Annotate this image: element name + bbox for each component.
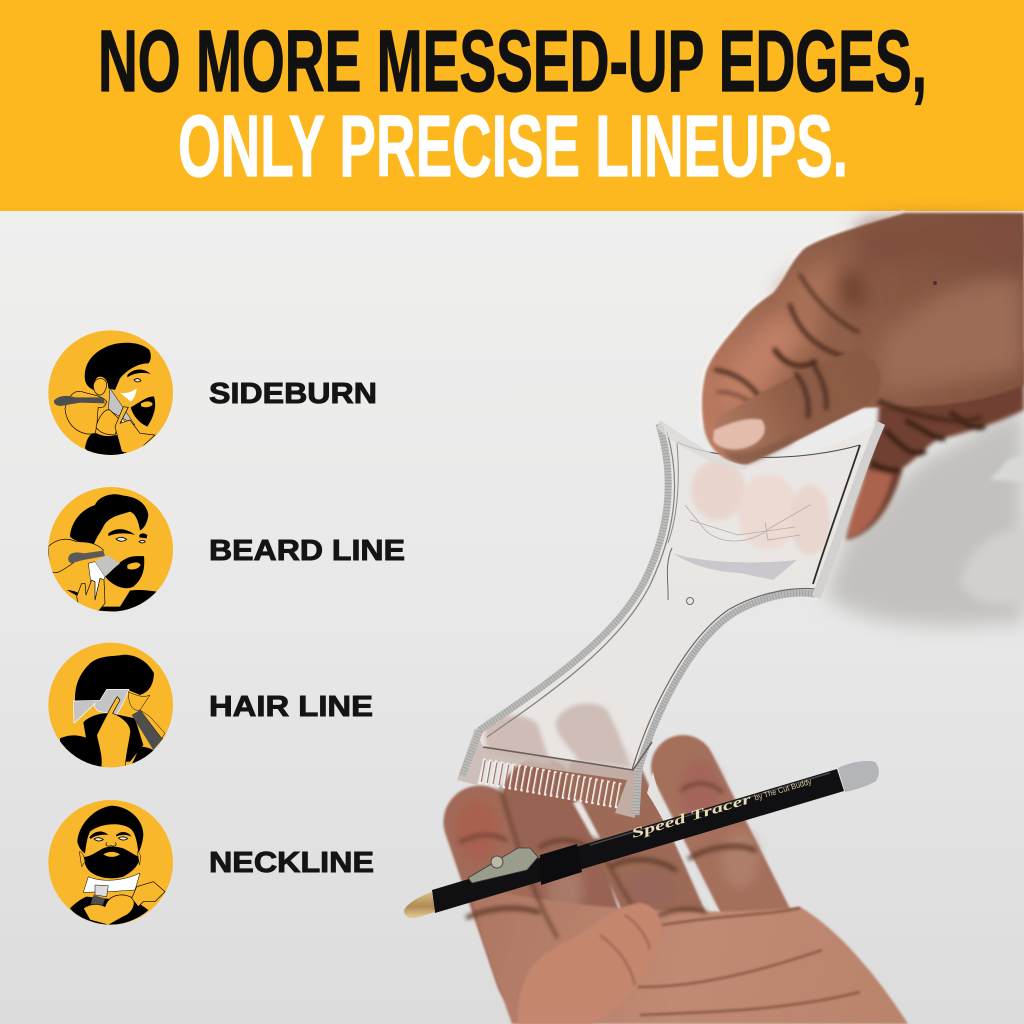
feature row: hair line (48, 643, 373, 772)
knuckle creases (716, 275, 980, 421)
comb teeth (481, 771, 621, 796)
photo background surface (0, 211, 1024, 1024)
icon: man trimming sideburn (48, 330, 173, 457)
photo: upper hand front (657, 213, 1024, 470)
fingers (480, 767, 760, 975)
finger creases (870, 412, 985, 471)
thumb (715, 348, 881, 464)
photo: lower open hand (456, 760, 908, 1024)
icon: man trimming beard line (48, 487, 173, 613)
light halo (702, 213, 905, 428)
sharpener screw (491, 856, 503, 868)
right edge and inner frame (816, 423, 881, 597)
pencil (404, 761, 879, 918)
barrel (432, 769, 844, 913)
thumbnail (713, 419, 765, 449)
cut-out shape (673, 553, 797, 580)
finger colour variation (456, 760, 758, 920)
label: HAIR LINE (209, 691, 373, 723)
thumb knuckle marks (795, 362, 826, 418)
finger and back highlights (715, 221, 1024, 415)
collar (540, 844, 582, 885)
feature row: sideburn (48, 330, 377, 457)
label: NECKLINE (209, 847, 374, 879)
cap (838, 761, 879, 792)
template body (475, 420, 880, 770)
gold tip (404, 892, 435, 918)
film over thumb (657, 420, 748, 470)
pencil brand text: Speed Tracer (630, 791, 754, 841)
base line (483, 742, 652, 770)
supporting thumb (518, 903, 660, 1024)
comb strip (457, 728, 637, 818)
icon: man trimming hair line (48, 643, 173, 772)
template ruler (457, 420, 881, 818)
header banner (0, 0, 1024, 211)
label: SIDEBURN (209, 378, 377, 410)
icon: man trimming neckline (48, 800, 173, 925)
thumb tip shade (722, 432, 800, 464)
pencil brand text (630, 773, 813, 841)
thumb and palm crease lines (600, 908, 860, 1015)
feature row: beard line (48, 487, 405, 613)
photo: upper hand fingers behind template (846, 350, 1024, 540)
feature row: neckline (48, 800, 374, 925)
pale fingers seen through template (485, 460, 830, 768)
palm (470, 885, 908, 1024)
light gaps between fingers (647, 772, 722, 914)
sharpener (468, 848, 538, 883)
pencil brand text: by The Cut Buddy (753, 777, 812, 802)
label: BEARD LINE (209, 535, 405, 567)
mole (933, 281, 937, 285)
faint template guide lines (685, 505, 810, 541)
barrel highlight (590, 773, 830, 845)
hand silhouette (702, 213, 1024, 464)
ruled lower edge (636, 593, 815, 815)
alignment line and hole (667, 548, 694, 604)
ruled left edge (462, 424, 668, 776)
finger creases (460, 783, 754, 937)
